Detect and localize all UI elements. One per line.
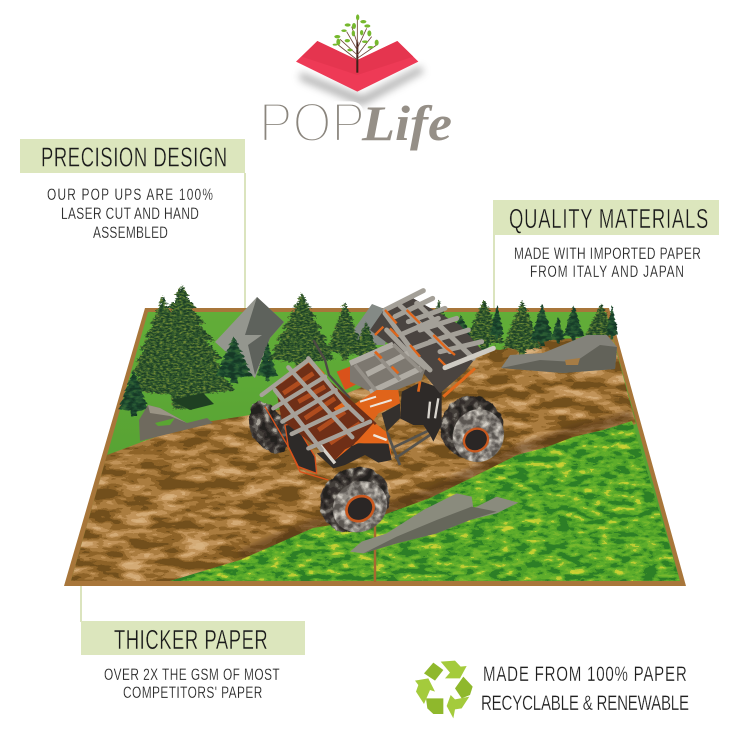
truck front half xyxy=(244,340,402,545)
cab side xyxy=(345,390,400,423)
rear grid orange accents xyxy=(375,310,455,367)
trees: middle xyxy=(268,293,380,371)
cab slats xyxy=(350,343,425,397)
description: ASSEMBLED xyxy=(93,224,168,243)
right tire xyxy=(430,386,513,471)
heading: THICKER PAPER xyxy=(114,625,268,656)
logo wordmark: Life: Life xyxy=(361,95,452,151)
bumper xyxy=(335,423,389,460)
panel: precision design xyxy=(20,139,245,243)
rock: left xyxy=(139,405,213,441)
description: OUR POP UPS ARE 100% xyxy=(47,186,213,205)
description xyxy=(47,186,213,243)
front grid base xyxy=(275,358,377,460)
description: OVER 2X THE GSM OF MOST xyxy=(104,666,280,685)
panel: thicker paper xyxy=(81,621,305,703)
roll bar xyxy=(313,340,350,398)
logo xyxy=(259,14,452,153)
logo: red open book xyxy=(296,41,418,92)
logo: tree xyxy=(333,14,379,73)
wheel arch xyxy=(317,443,392,468)
logo wordmark: POP: POP xyxy=(259,90,365,154)
trees: dark left xyxy=(118,337,278,416)
mountain behind vehicle xyxy=(350,304,392,345)
heading: QUALITY MATERIALS xyxy=(509,204,708,235)
rock: right xyxy=(501,335,617,373)
description: FROM ITALY AND JAPAN xyxy=(530,263,684,282)
mud trail xyxy=(71,335,636,581)
trees: right xyxy=(430,300,617,356)
mountain left xyxy=(215,297,284,378)
recycling message: RECYCLABLE & RENEWABLE xyxy=(481,690,689,715)
rear grid base xyxy=(370,298,482,393)
frame rods xyxy=(387,428,433,465)
heading: PRECISION DESIGN xyxy=(41,143,227,174)
recycling message: MADE FROM 100% PAPER xyxy=(483,661,687,686)
description xyxy=(104,666,280,703)
front tire xyxy=(308,455,402,545)
heading bar xyxy=(20,139,245,173)
left tires xyxy=(244,397,290,453)
description: MADE WITH IMPORTED PAPER xyxy=(514,245,701,264)
truck rear half xyxy=(337,291,513,471)
description: LASER CUT AND HAND xyxy=(61,205,199,224)
cab floor xyxy=(337,363,368,390)
front grid bars xyxy=(262,358,370,450)
monster truck xyxy=(244,291,513,545)
rear grid bars xyxy=(385,291,482,370)
logo shadow xyxy=(300,66,424,106)
icon: recycling symbol xyxy=(415,661,473,718)
heading bar xyxy=(493,200,719,235)
connector lines xyxy=(81,173,494,622)
rock: foreground xyxy=(350,493,518,553)
trees: dark right xyxy=(450,304,618,346)
description xyxy=(514,245,701,282)
grass hill xyxy=(170,421,680,581)
chassis panel xyxy=(285,423,317,473)
mud shadow along hill xyxy=(240,416,632,556)
card base border xyxy=(64,308,686,586)
heading bar xyxy=(81,621,305,655)
pop-up card scene xyxy=(64,285,686,586)
orange ribbed panels xyxy=(280,362,360,443)
recycling message xyxy=(481,661,689,715)
card fold xyxy=(374,517,376,582)
description: COMPETITORS' PAPER xyxy=(123,684,262,703)
meadow xyxy=(71,312,680,581)
hood xyxy=(350,422,392,455)
tree shadow xyxy=(171,393,214,410)
rear frame xyxy=(400,382,442,442)
panel: quality materials xyxy=(493,200,719,282)
trees: left xyxy=(128,285,236,409)
